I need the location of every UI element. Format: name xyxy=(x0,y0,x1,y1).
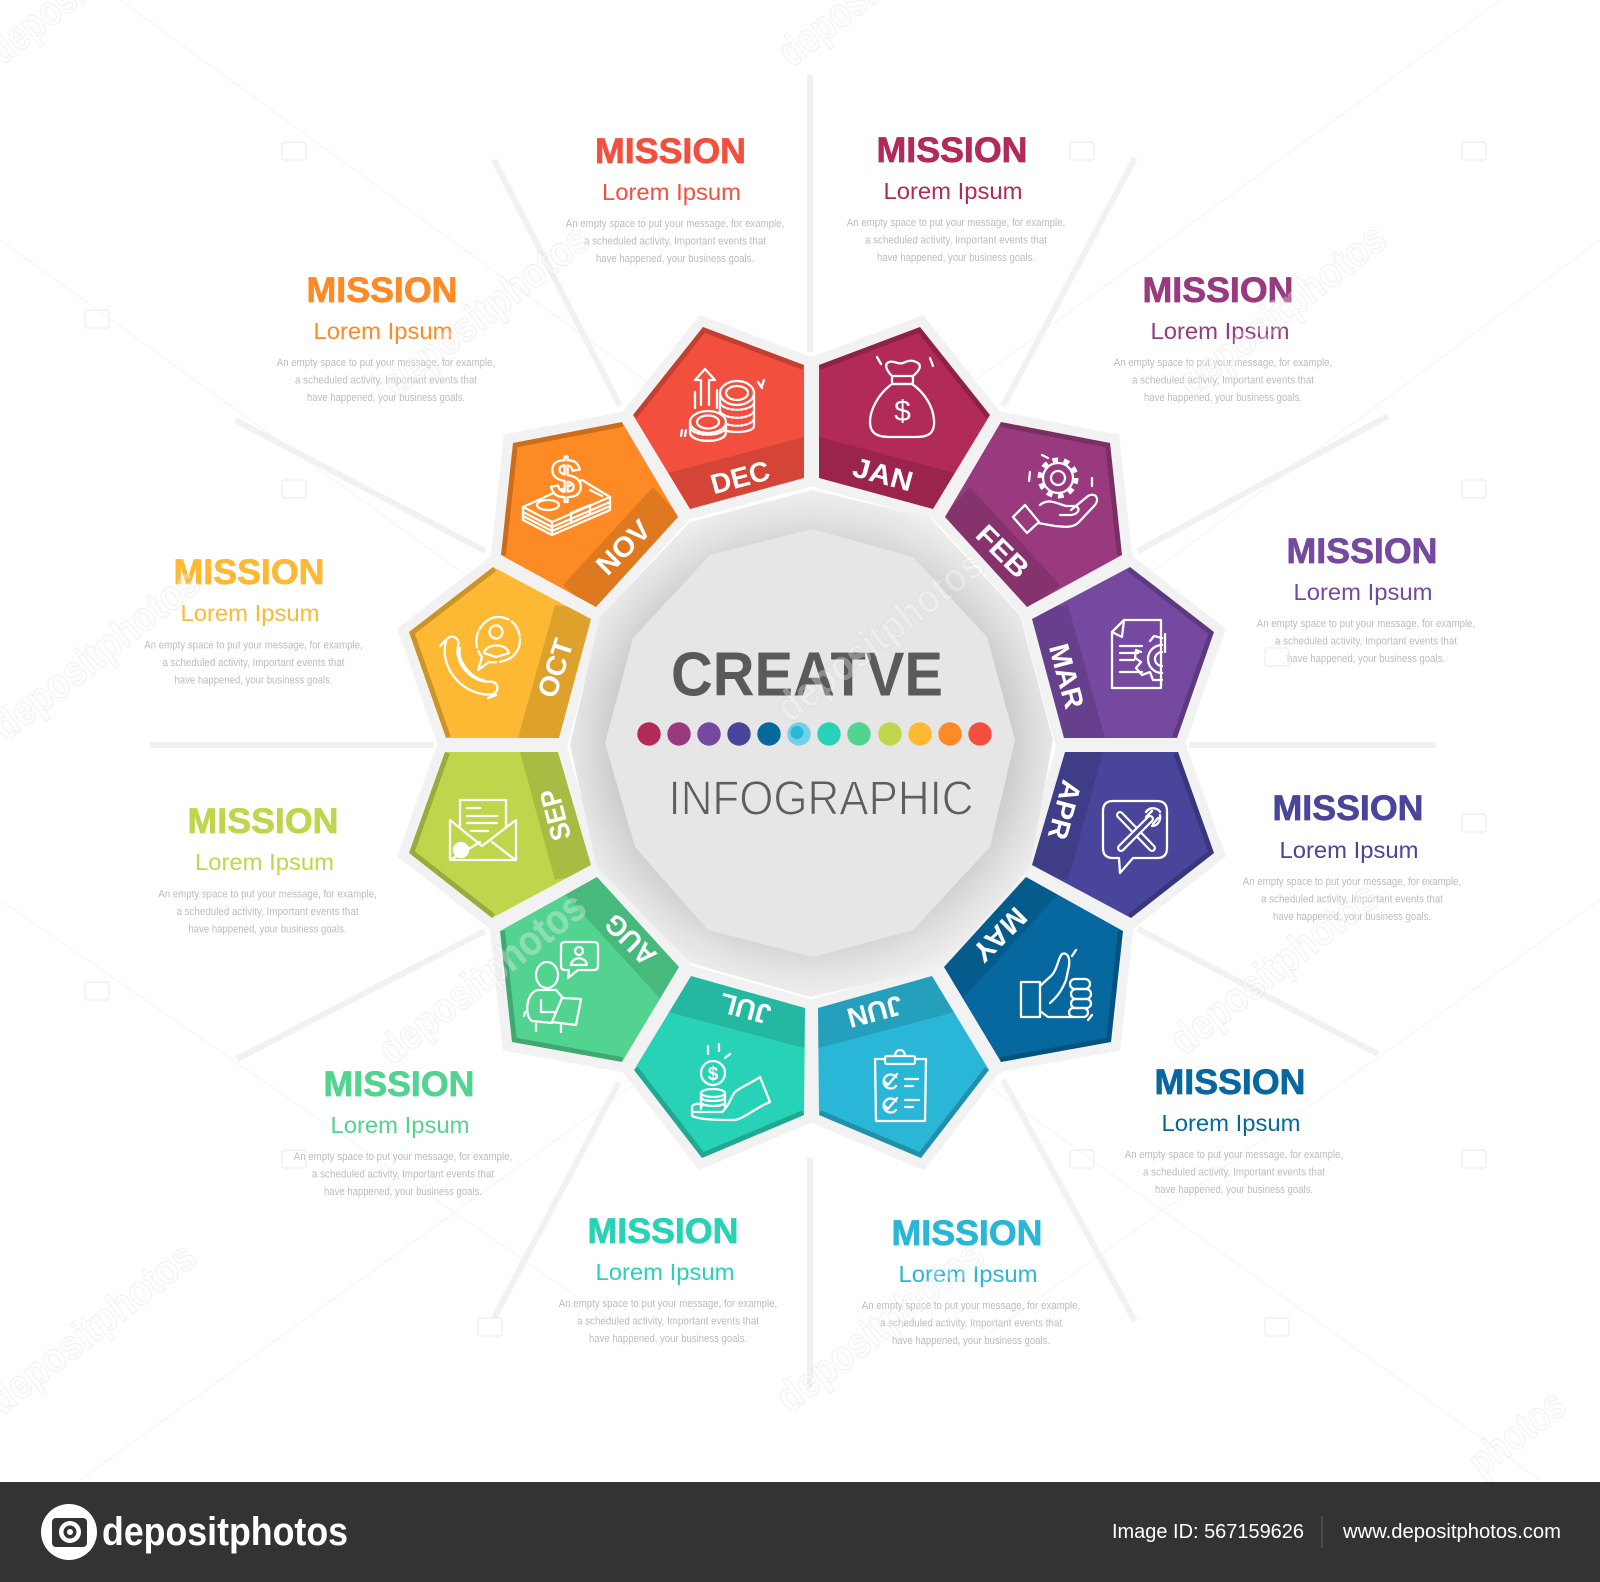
segment: DEC xyxy=(633,327,808,520)
month label: MAY: MAY xyxy=(966,901,1033,968)
text block: OCT mission: a scheduled activity, Important events that xyxy=(162,657,345,669)
text block: NOV mission: a scheduled activity, Important events that xyxy=(295,374,478,386)
text block: AUG mission: An empty space to put your message, for example, xyxy=(294,1151,512,1163)
text block: MAR mission: An empty space to put your message, for example, xyxy=(1257,618,1475,630)
text block: OCT mission: have happened, your business goals. xyxy=(174,674,332,686)
text block: DEC mission: a scheduled activity, Important events that xyxy=(584,236,767,248)
title: CREATVE: CREATVE xyxy=(671,640,943,710)
icon: thumbs up xyxy=(1021,950,1092,1020)
text block: JUL mission: MISSION xyxy=(588,1212,738,1251)
segment: JUL xyxy=(634,970,808,1158)
icon: hand with coins xyxy=(692,1044,770,1120)
text block: SEP mission: a scheduled activity, Important events that xyxy=(176,906,359,918)
text block: MAR mission: have happened, your business goals. xyxy=(1287,653,1445,665)
text block: APR mission: An empty space to put your message, for example, xyxy=(1243,876,1461,888)
text block: APR mission: MISSION xyxy=(1272,789,1424,828)
footer brand name: depositphotos xyxy=(102,1510,348,1554)
text block: SEP mission: Lorem Ipsum xyxy=(195,849,334,875)
text block: AUG mission: MISSION xyxy=(324,1065,474,1104)
segment: FEB xyxy=(940,422,1122,615)
centre hub xyxy=(570,490,1053,997)
segment: NOV xyxy=(501,422,683,615)
segment: AUG xyxy=(500,870,688,1062)
text block: JUL mission xyxy=(559,1212,777,1345)
icon: open envelope with letter xyxy=(450,800,516,860)
text block: JUN mission xyxy=(862,1214,1080,1347)
text block: AUG mission: a scheduled activity, Important events that xyxy=(312,1168,495,1180)
icon: document with gear xyxy=(1112,620,1165,688)
icon: money bag xyxy=(870,357,934,437)
icon: person reading with speech bubble xyxy=(524,942,598,1032)
text block: JAN mission xyxy=(847,131,1065,264)
segment: JAN xyxy=(815,327,990,520)
hub inner face xyxy=(605,529,1015,957)
segment: OCT xyxy=(409,567,598,745)
text block: JUN mission: Lorem Ipsum xyxy=(898,1261,1038,1287)
watermark layer: depositphotos xyxy=(767,540,993,731)
icon: hand holding gear xyxy=(1013,455,1097,533)
text block: DEC mission xyxy=(566,132,784,265)
text block: MAR mission: a scheduled activity, Important events that xyxy=(1275,636,1458,648)
text block: JAN mission: Lorem Ipsum xyxy=(884,178,1022,204)
text block: SEP mission xyxy=(158,802,377,936)
footer image ID: Image ID: 567159626 xyxy=(1112,1521,1304,1543)
watermark layer: photos xyxy=(1459,1380,1574,1485)
text block: JUL mission: An empty space to put your message, for example, xyxy=(559,1298,777,1310)
text block: JUL mission: have happened, your business goals. xyxy=(589,1333,747,1345)
text block: FEB mission xyxy=(1114,271,1332,404)
text block: SEP mission: MISSION xyxy=(188,802,338,841)
text block: SEP mission: An empty space to put your message, for example, xyxy=(158,888,377,900)
icon: money stack with dollar sign xyxy=(523,447,610,535)
segment: MAY xyxy=(935,870,1123,1062)
watermark layer: depositphotos xyxy=(1161,872,1387,1063)
segment: JUN xyxy=(815,970,989,1158)
icon: clipboard checklist xyxy=(875,1050,926,1121)
text block: DEC mission: MISSION xyxy=(595,132,746,171)
text block: OCT mission: MISSION xyxy=(174,553,324,592)
text block: FEB mission: a scheduled activity, Important events that xyxy=(1132,374,1315,386)
text block: MAY mission: MISSION xyxy=(1154,1063,1306,1102)
text block: APR mission: a scheduled activity, Important events that xyxy=(1261,894,1444,906)
subtitle: INFOGRAPHIC: INFOGRAPHIC xyxy=(668,772,974,826)
segment: MAR xyxy=(1025,567,1214,745)
text block: JAN mission: have happened, your business goals. xyxy=(877,252,1035,264)
icon: hand with coins: $ xyxy=(708,1064,719,1085)
text block: OCT mission: Lorem Ipsum xyxy=(180,600,320,626)
spoke lines radiating from the wheel xyxy=(150,75,1436,1388)
watermark layer: depositphotos xyxy=(373,214,599,405)
watermark layer: depositphotos xyxy=(1169,214,1395,405)
pentagon halos xyxy=(409,327,1214,1158)
text block: DEC mission: have happened, your business goals. xyxy=(596,253,754,265)
icon: money bag: $ xyxy=(894,395,911,428)
text block: MAR mission: MISSION xyxy=(1286,532,1438,571)
text block: OCT mission xyxy=(144,553,363,686)
text block: MAY mission: a scheduled activity, Important events that xyxy=(1143,1166,1326,1178)
segment: SEP xyxy=(409,745,603,918)
watermark layer: depositphotos xyxy=(767,1230,993,1421)
text block: JAN mission: MISSION xyxy=(876,131,1028,170)
text block: JAN mission: a scheduled activity, Important events that xyxy=(865,234,1048,246)
text block: MAY mission xyxy=(1125,1063,1343,1196)
text block: AUG mission: have happened, your business goals. xyxy=(324,1186,482,1198)
text block: APR mission: Lorem Ipsum xyxy=(1280,837,1418,863)
text block: JUL mission: a scheduled activity, Important events that xyxy=(577,1316,760,1328)
icon: coin stacks and rising arrow xyxy=(681,369,764,441)
text block: NOV mission xyxy=(277,271,495,404)
footer bar xyxy=(0,1482,1600,1582)
footer logo: camera badge xyxy=(41,1504,97,1560)
month label: JUL: JUL xyxy=(716,987,774,1030)
text block: JUN mission: have happened, your business goals. xyxy=(892,1335,1050,1347)
text block: NOV mission: Lorem Ipsum xyxy=(314,318,452,344)
month label: SEP: SEP xyxy=(534,786,577,844)
hub outer bevel ring xyxy=(570,490,1053,997)
text block: MAY mission: Lorem Ipsum xyxy=(1162,1110,1300,1136)
text block: NOV mission: An empty space to put your message, for example, xyxy=(277,357,495,369)
text block: JUN mission: MISSION xyxy=(892,1214,1042,1253)
month label: JUN: JUN xyxy=(844,989,906,1034)
icon: tools in speech bubble xyxy=(1103,801,1167,873)
text block: AUG mission xyxy=(294,1065,512,1198)
text block: SEP mission: have happened, your business goals. xyxy=(188,924,346,936)
text block: NOV mission: have happened, your business goals. xyxy=(307,392,465,404)
text block: OCT mission: An empty space to put your message, for example, xyxy=(144,640,363,652)
text block: MAY mission: An empty space to put your message, for example, xyxy=(1125,1149,1343,1161)
segment: APR xyxy=(1020,745,1214,918)
month label: AUG: AUG xyxy=(598,907,663,972)
text block: AUG mission: Lorem Ipsum xyxy=(330,1112,470,1138)
text block: DEC mission: An empty space to put your message, for example, xyxy=(566,218,784,230)
month label: MAR: MAR xyxy=(1043,640,1090,712)
text block: APR mission: have happened, your business goals. xyxy=(1273,911,1431,923)
month label: DEC: DEC xyxy=(707,455,773,500)
text block: FEB mission: have happened, your business goals. xyxy=(1144,392,1302,404)
month label: NOV: NOV xyxy=(590,514,657,581)
month label: OCT: OCT xyxy=(531,635,579,701)
text block: FEB mission: Lorem Ipsum xyxy=(1150,318,1290,344)
icon: money stack with dollar sign: $ xyxy=(550,447,582,510)
month label: JAN: JAN xyxy=(849,452,916,497)
text block: MAR mission: Lorem Ipsum xyxy=(1294,579,1432,605)
icon: phone and contact xyxy=(440,617,520,698)
text block: JAN mission: An empty space to put your message, for example, xyxy=(847,217,1065,229)
text block: APR mission xyxy=(1243,789,1461,923)
text block: DEC mission: Lorem Ipsum xyxy=(602,179,741,205)
month label: FEB: FEB xyxy=(970,518,1036,584)
watermark layer: depositphotos xyxy=(369,882,595,1073)
month label: APR: APR xyxy=(1042,777,1087,843)
footer website: www.depositphotos.com xyxy=(1342,1521,1561,1543)
text block: JUN mission: a scheduled activity, Important events that xyxy=(880,1318,1063,1330)
text block: MAY mission: have happened, your business goals. xyxy=(1155,1184,1313,1196)
colour dots row xyxy=(637,722,992,746)
text block: JUN mission: An empty space to put your message, for example, xyxy=(862,1300,1080,1312)
text block: MAR mission xyxy=(1257,532,1475,665)
text block: JUL mission: Lorem Ipsum xyxy=(596,1259,734,1285)
text block: FEB mission: An empty space to put your message, for example, xyxy=(1114,357,1332,369)
text block: FEB mission: MISSION xyxy=(1142,271,1294,310)
text block: NOV mission: MISSION xyxy=(306,271,458,310)
